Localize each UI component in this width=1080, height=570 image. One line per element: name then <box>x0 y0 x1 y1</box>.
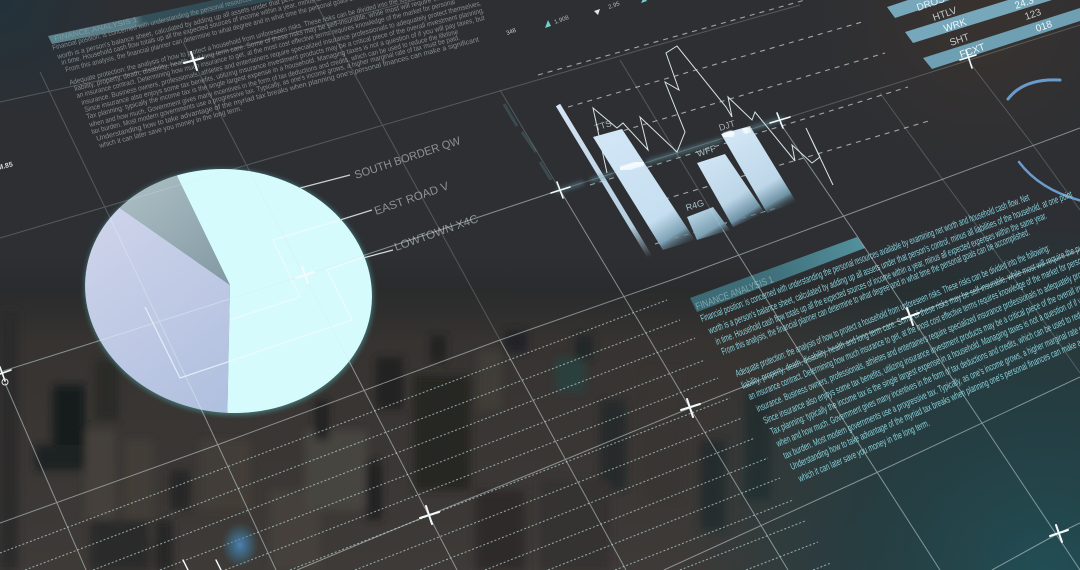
heading bar right <box>690 237 865 313</box>
label: east road <box>340 180 451 220</box>
table labels <box>915 0 1054 61</box>
bar: R4G <box>685 198 730 240</box>
pie slice: pale cyan <box>176 169 372 413</box>
lens flare <box>221 522 259 568</box>
teal dashes beside chart <box>504 104 551 180</box>
bar: TTS <box>593 118 695 250</box>
text block: finance analysis top left <box>48 0 485 150</box>
bar: TTS: TTS <box>594 118 613 133</box>
label: south border: SOUTH BORDER QW <box>353 135 462 182</box>
bar: DJT <box>718 118 797 213</box>
ticker row top of chart: 1.908 <box>554 15 570 26</box>
bar: WFF <box>696 143 765 227</box>
chart axis <box>558 105 650 257</box>
ticker row top of chart: 348 <box>506 28 518 37</box>
table labels: WRK <box>942 17 968 35</box>
bar: WFF: WFF <box>696 143 718 159</box>
dashed lines: chart guide lines <box>538 0 932 244</box>
dashed lines: lower perspective grid <box>0 300 831 570</box>
heading bar right: FINANCE ANALYSIS 1 <box>694 274 775 313</box>
bar chart with line overlay <box>558 46 833 257</box>
paragraph top left <box>51 0 485 150</box>
text block: finance analysis right <box>690 189 1080 485</box>
marker ring left edge <box>2 379 8 385</box>
gauge arcs right <box>1008 80 1080 201</box>
paragraph top left: Tax planning: typically the income tax is the single largest expense in a household. Managing taxes is not a question of if you will pay taxes, but <box>85 13 485 121</box>
paragraph top left: which it can later save you money in the long term. <box>97 104 243 150</box>
paragraph top left: tax burden. Most modern governments use a progressive tax. Typically, as one's income grows, a higher marginal rate of tax must be paid. <box>90 33 461 136</box>
bar highlights <box>558 119 782 191</box>
pie slice: lavender <box>85 208 230 413</box>
heading bar top left <box>48 0 300 44</box>
table labels: HTLV <box>931 5 959 24</box>
pie chart <box>82 166 376 418</box>
label: lowtown <box>363 213 480 258</box>
pie overlay brackets <box>145 220 363 378</box>
legend labels with leader lines <box>300 135 480 258</box>
table labels: FCXT <box>958 42 987 61</box>
bar: R4G: R4G <box>685 198 705 213</box>
table labels: SHT <box>948 32 971 49</box>
paragraph right: which it can later save you money in the long term. <box>796 418 931 485</box>
label: lowtown: LOWTOWN X4C <box>393 213 480 254</box>
label: east road: EAST ROAD V <box>373 180 451 218</box>
table labels: 123 <box>1023 7 1043 23</box>
line graph <box>593 46 833 185</box>
table top right <box>887 0 1080 69</box>
pie slice: grey <box>120 176 230 284</box>
ticker row top of chart: 2.95 <box>608 1 621 11</box>
table row bars <box>887 0 1080 69</box>
table labels: 018 <box>1034 19 1054 35</box>
paragraph right <box>699 189 1080 485</box>
paragraph top left: when and how much. Government gives many incentives in the form of tax deductions and credits, which can be used to reduce the lifetime <box>87 27 459 129</box>
ticker row top of chart <box>506 0 647 37</box>
bar: DJT: DJT <box>718 118 737 133</box>
paragraph top left: Understanding how to take advantage of the myriad tax breaks when planning one's personal finances can make a significant <box>95 35 480 143</box>
label: south border <box>300 135 462 188</box>
heading bar top left: FINANCE ANALYSIS 1 <box>53 15 138 43</box>
